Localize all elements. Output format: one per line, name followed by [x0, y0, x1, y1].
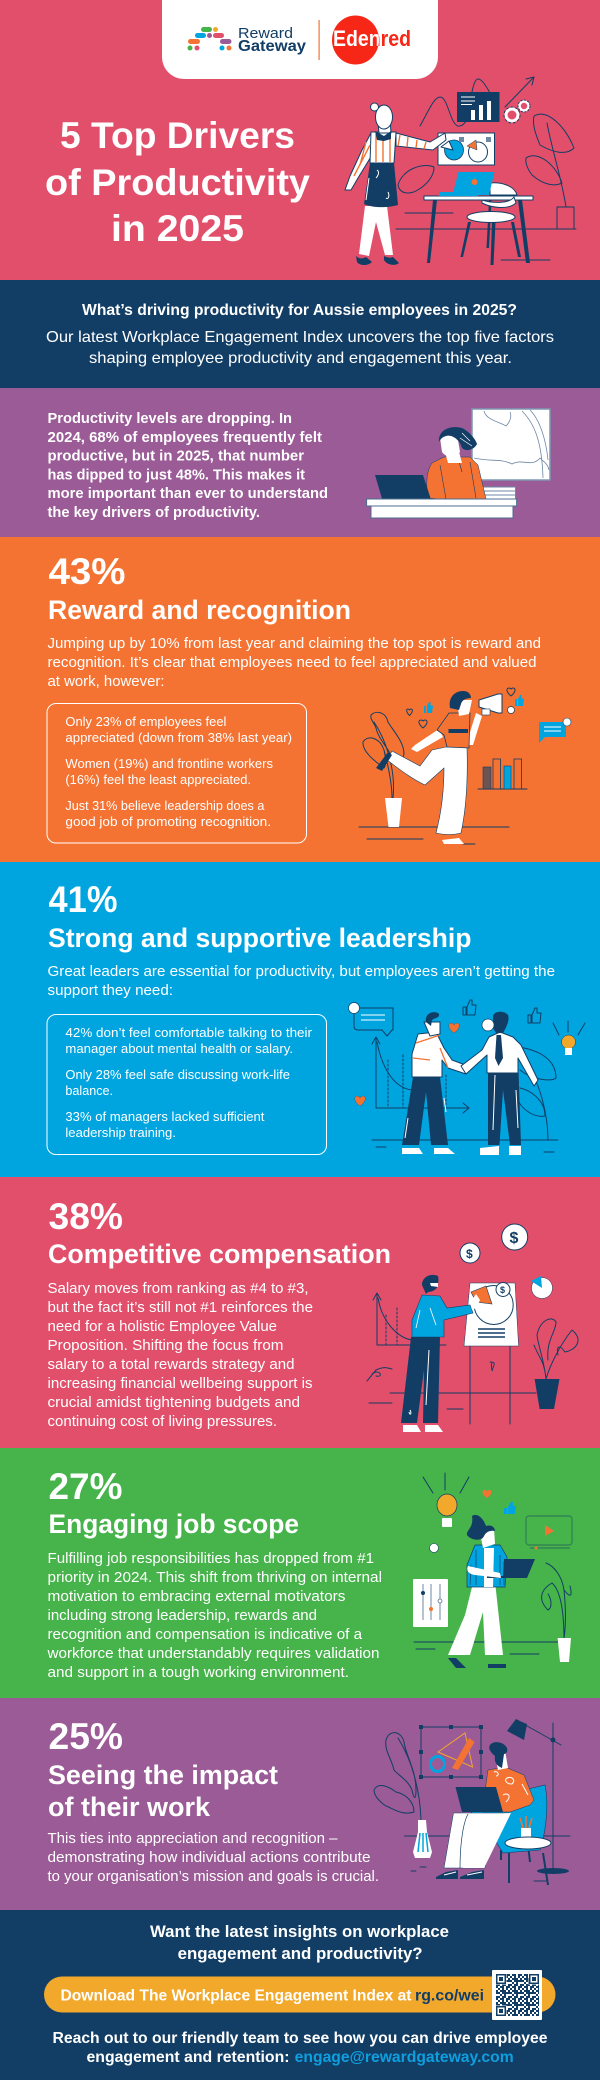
plant [363, 712, 404, 827]
illustration: woman with laptop [413, 1473, 572, 1668]
books [476, 487, 516, 499]
body text: at work, however: [48, 674, 164, 690]
window [472, 409, 550, 480]
desk and laptop [424, 172, 533, 263]
body text: motivation to embracing external motivators [48, 1589, 346, 1605]
illustration: woman at desk by window [367, 409, 550, 518]
body text: Jumping up by 10% from last year and claiming the top spot is reward and [48, 636, 541, 652]
body text: need for a holistic Employee Value [48, 1319, 277, 1335]
stat: 41%: 41% [48, 879, 118, 920]
pie [531, 1276, 552, 1298]
man [436, 1742, 534, 1879]
panel: hero [0, 0, 600, 280]
contact text [52, 2030, 548, 2066]
chair [460, 197, 521, 265]
download pill: rg.co/wei [415, 1988, 484, 2004]
panel: call to action [0, 1910, 600, 2080]
body text [46, 1551, 382, 1681]
heading: Reward and recognition [48, 595, 351, 625]
logo: Reward Gateway [188, 25, 306, 55]
callout box: Only 28% feel safe discussing work-life [65, 1067, 290, 1082]
panel: seeing the impact [0, 1698, 600, 1910]
heading: of their work [48, 1792, 211, 1822]
download pill: Download The Workplace Engagement Index at [60, 1988, 412, 2004]
chat bubble [539, 718, 571, 743]
body text: crucial amidst tightening budgets and [48, 1395, 300, 1411]
panel: strong leadership [0, 862, 600, 1177]
body text: workforce that understandably requires validation [46, 1646, 379, 1662]
contact text: engage@rewardgateway.com [295, 2049, 514, 2066]
title: 5 Top Drivers [60, 114, 295, 156]
plant [518, 1047, 556, 1140]
contact text: engagement and retention: [86, 2049, 290, 2066]
vase plant [374, 1733, 432, 1858]
heart and like [483, 1490, 516, 1514]
bar chart [478, 759, 527, 789]
panel: reward and recognition [0, 537, 600, 862]
video panel [526, 1516, 572, 1550]
desk [367, 499, 517, 518]
design frame [419, 1725, 483, 1779]
text block: 2024, 68% of employees frequently felt [48, 430, 322, 446]
intro heading: What’s driving productivity for Aussie employees in 2025? [82, 302, 517, 319]
orange top [427, 457, 486, 499]
contact text: Reach out to our friendly team to see how you can drive employee [52, 2030, 548, 2047]
logo: Reward Gateway: Gateway [238, 38, 306, 55]
left man [402, 1012, 468, 1154]
download pill [44, 1976, 556, 2012]
CTA heading: engagement and productivity? [178, 1944, 423, 1963]
laptop [375, 475, 443, 502]
body text: recognition and compensation is indicative of a [48, 1627, 363, 1643]
gears [504, 100, 530, 123]
callout box: manager about mental health or salary. [65, 1041, 293, 1056]
chart axes [372, 1037, 469, 1113]
panel: engaging job scope [0, 1448, 600, 1698]
body text [48, 1831, 379, 1885]
text block: has dipped to just 48%. This makes it [48, 468, 305, 484]
chart [373, 1293, 446, 1345]
woman [345, 103, 446, 265]
CTA heading: Want the latest insights on workplace [150, 1922, 449, 1941]
navy chart panel [457, 92, 500, 122]
text block: more important than ever to understand [48, 486, 328, 502]
stat: 38%: 38% [48, 1196, 123, 1237]
title [45, 114, 310, 249]
callout box: good job of promoting recognition. [65, 814, 271, 829]
body text: Proposition. Shifting the focus from [48, 1338, 284, 1354]
thumbs up [463, 1000, 541, 1023]
CTA heading [150, 1922, 449, 1963]
body text: Fulfilling job responsibilities has dropped from #1 [48, 1551, 374, 1567]
callout box: appreciated (down from 38% last year) [65, 730, 292, 745]
flipchart: $ [500, 1285, 505, 1295]
body text: support they need: [48, 983, 173, 999]
body text [48, 636, 541, 690]
heading: Competitive compensation [48, 1239, 391, 1269]
body text: but the fact it’s still not #1 reinforces the [48, 1300, 313, 1316]
callout box: Only 23% of employees feel [65, 714, 227, 729]
text block: productive, but in 2025, that number [48, 448, 304, 464]
stat: 43%: 43% [48, 551, 126, 592]
hearts and likes [407, 688, 524, 728]
bulb [423, 1473, 469, 1527]
woman [376, 691, 502, 844]
intro text: Our latest Workplace Engagement Index uncovers the top five factors [46, 329, 554, 346]
intro text: shaping employee productivity and engagement this year. [89, 350, 512, 367]
illustration: woman presenting charts [345, 77, 576, 265]
body text [48, 1281, 313, 1430]
body text: priority in 2024. This shift from thriving on internal [48, 1570, 382, 1586]
body text: increasing financial wellbeing support is [48, 1376, 312, 1392]
logo: Edenred: Edenred [333, 26, 411, 51]
chair [461, 1785, 549, 1885]
coins: $ [510, 1230, 518, 1247]
title: in 2025 [111, 207, 244, 249]
pie chart board [438, 133, 494, 165]
woman [448, 1515, 535, 1668]
logo: Edenred [332, 16, 411, 64]
coins [460, 1224, 528, 1263]
callout box: Women (19%) and frontline workers [65, 756, 274, 771]
callout box: (16%) feel the least appreciated. [65, 772, 251, 787]
logo tab [162, 0, 438, 79]
QR code [492, 1970, 542, 2020]
stat: 25%: 25% [48, 1716, 123, 1757]
callout box: balance. [65, 1083, 113, 1098]
right man [461, 1012, 538, 1155]
hearts [355, 1023, 459, 1106]
title: of Productivity [45, 161, 310, 203]
panel: productivity levels [0, 388, 600, 537]
illustration: man in armchair [374, 1719, 570, 1885]
head [439, 427, 477, 456]
body text: recognition. It’s clear that employees need to feel appreciated and valued [48, 655, 536, 671]
body text: Salary moves from ranking as #4 to #3, [48, 1281, 308, 1297]
body text: including strong leadership, rewards and [48, 1608, 317, 1624]
body text: to your organisation’s mission and goals is crucial. [48, 1869, 379, 1885]
logo: Reward Gateway: Reward [238, 25, 293, 42]
body text: This ties into appreciation and recognition – [48, 1831, 338, 1847]
heading: Seeing the impact [48, 1760, 278, 1790]
slider panel [413, 1579, 448, 1627]
intro text [46, 329, 554, 367]
body text [48, 964, 555, 999]
body text: Great leaders are essential for productivity, but employees aren’t getting the [48, 964, 555, 980]
light bulb [553, 1021, 585, 1055]
logo: Edenred: Edenred [333, 26, 411, 51]
body text: demonstrating how individual actions contribute [48, 1850, 370, 1866]
coins: $ [466, 1247, 473, 1261]
heading: Engaging job scope [48, 1509, 299, 1539]
callout box: 42% don’t feel comfortable talking to their [65, 1025, 313, 1040]
plant pot [534, 1319, 578, 1409]
text block [48, 411, 328, 521]
lamp [507, 1719, 569, 1874]
text block: Productivity levels are dropping. In [48, 411, 292, 427]
heading: Strong and supportive leadership [48, 923, 472, 953]
speech bubble [348, 1002, 393, 1036]
body text: and support in a tough working environment. [48, 1665, 349, 1681]
heading [48, 1760, 278, 1822]
illustration: handshake [348, 1000, 585, 1155]
illustration: woman with megaphone [359, 688, 571, 844]
callout box: leadership training. [65, 1125, 176, 1140]
plant [542, 1563, 571, 1662]
callout box: 33% of managers lacked sufficient [65, 1109, 265, 1124]
text block: the key drivers of productivity. [48, 505, 260, 521]
side table [505, 1816, 551, 1849]
callout box: Just 31% believe leadership does a [65, 798, 265, 813]
man [401, 1275, 480, 1432]
illustration: man at flipchart [367, 1224, 578, 1432]
callout box [47, 1014, 326, 1154]
callout box [47, 704, 306, 843]
stat: 27%: 27% [48, 1466, 122, 1507]
panel: intro [0, 280, 600, 388]
flipchart [464, 1282, 519, 1346]
body text: continuing cost of living pressures. [48, 1414, 277, 1430]
panel: competitive compensation [0, 1177, 600, 1448]
body text: salary to a total rewards strategy and [48, 1357, 294, 1373]
